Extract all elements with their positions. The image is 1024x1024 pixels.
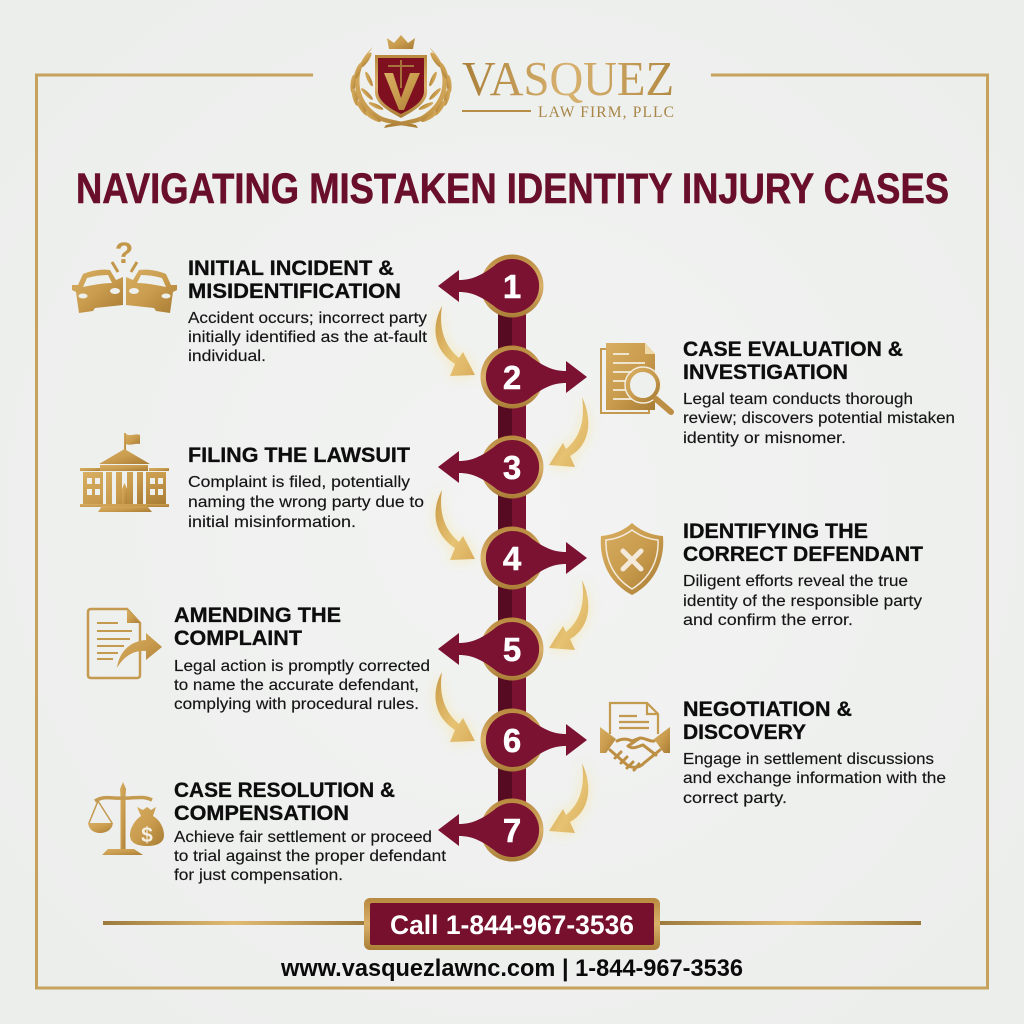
footer rule left <box>103 921 365 925</box>
step 2 heading <box>683 338 903 384</box>
step 2 body: review; discovers potential mistaken <box>683 410 955 427</box>
call button: Call 1-844-967-3536 <box>390 910 634 940</box>
step 2 marker <box>480 346 587 408</box>
step 3 body <box>188 474 424 531</box>
step 5 heading: AMENDING THE <box>174 604 341 627</box>
step 5 body <box>174 658 430 713</box>
timeline spine <box>498 286 526 830</box>
step 5 body: Legal action is promptly corrected <box>174 658 430 675</box>
step 3 heading: FILING THE LAWSUIT <box>188 444 410 467</box>
step 7 body: Achieve fair settlement or proceed <box>174 829 432 846</box>
step 1 body: initially identified as the at-fault <box>188 329 428 346</box>
step 1 marker <box>438 254 544 318</box>
step 7 body <box>174 829 447 884</box>
step 2 body <box>683 391 955 447</box>
step 7 heading: COMPENSATION <box>174 802 349 825</box>
step 4 body <box>683 573 922 629</box>
step 1 body: individual. <box>188 348 266 365</box>
step 6 heading: NEGOTIATION & <box>683 698 852 721</box>
icon: document with forward arrow <box>88 609 162 678</box>
step 4 body: and confirm the error. <box>683 612 853 629</box>
icon: scales and money bag: $ <box>141 824 153 847</box>
step 5 body: to name the accurate defendant, <box>174 677 419 694</box>
step 4 body: identity of the responsible party <box>683 593 922 610</box>
step 2 heading: CASE EVALUATION & <box>683 338 903 361</box>
step 6 marker: 6 <box>503 722 521 759</box>
step 2 marker: 2 <box>503 359 521 396</box>
step 3 marker <box>438 436 544 498</box>
step 3 body: naming the wrong party due to <box>188 494 424 511</box>
icon: colliding cars with question mark <box>72 237 177 313</box>
step 4 marker: 4 <box>503 540 522 577</box>
step 7 heading <box>174 779 395 825</box>
step 2 body: Legal team conducts thorough <box>683 391 913 408</box>
step 4 heading: IDENTIFYING THE <box>683 520 868 543</box>
step 2 body: identity or misnomer. <box>683 430 846 447</box>
step 6 body: correct party. <box>683 790 787 807</box>
step 1 text <box>188 257 428 365</box>
curved gold arrows <box>435 306 588 833</box>
icon: courthouse <box>80 433 169 512</box>
step 1 heading: MISIDENTIFICATION <box>188 280 401 303</box>
step 3 marker: 3 <box>503 449 521 486</box>
icon: colliding cars with question mark: ? <box>115 237 133 270</box>
step 1 body <box>188 310 428 365</box>
step 1 marker: 1 <box>503 268 521 305</box>
step 7 body: for just compensation. <box>174 867 343 884</box>
step 5 heading: COMPLAINT <box>174 627 302 650</box>
footer rule right <box>659 921 921 925</box>
icon: shield with X <box>601 523 663 595</box>
logo emblem: laurel wreath, crown and shield <box>350 35 452 128</box>
logo: Vasquez Law Firm <box>350 35 674 128</box>
step 6 body: and exchange information with the <box>683 770 946 787</box>
step 7 heading: CASE RESOLUTION & <box>174 779 395 802</box>
step 6 marker <box>480 708 587 772</box>
step 3 body: initial misinformation. <box>188 514 356 531</box>
step 6 body <box>683 751 946 807</box>
step 3 body: Complaint is filed, potentially <box>188 474 410 491</box>
website and phone line: www.vasquezlawnc.com | 1-844-967-3536 <box>280 955 743 982</box>
step 5 body: complying with procedural rules. <box>174 696 419 713</box>
step 5 text <box>174 604 430 713</box>
step 6 body: Engage in settlement discussions <box>683 751 934 768</box>
step 5 marker <box>438 618 544 680</box>
step 6 heading: DISCOVERY <box>683 721 806 744</box>
step 7 text <box>174 779 447 884</box>
step 2 text <box>683 338 955 447</box>
step 7 marker <box>438 798 544 862</box>
step 4 heading: CORRECT DEFENDANT <box>683 543 923 566</box>
step 6 heading <box>683 698 852 744</box>
icon: document with magnifying glass <box>601 343 671 413</box>
logo wordmark: VASQUEZ <box>462 51 674 106</box>
logo subtitle: LAW FIRM, PLLC <box>538 104 674 121</box>
step 4 marker <box>480 526 587 590</box>
step 4 body: Diligent efforts reveal the true <box>683 573 908 590</box>
step 7 body: to trial against the proper defendant <box>174 848 447 865</box>
step 1 body: Accident occurs; incorrect party <box>188 310 427 327</box>
step 5 marker: 5 <box>503 631 521 668</box>
step 4 heading <box>683 520 923 566</box>
step 7 marker: 7 <box>503 812 521 849</box>
step 3 text <box>188 444 424 531</box>
step 1 heading <box>188 257 401 303</box>
step 1 heading: INITIAL INCIDENT & <box>188 257 394 280</box>
step 2 heading: INVESTIGATION <box>683 361 848 384</box>
step 6 text <box>683 698 946 807</box>
call button <box>364 898 660 950</box>
step 4 text <box>683 520 923 629</box>
icon: handshake with document <box>600 703 670 770</box>
icon: scales and money bag <box>88 782 164 855</box>
step 5 heading <box>174 604 341 650</box>
logo rule <box>462 110 531 112</box>
